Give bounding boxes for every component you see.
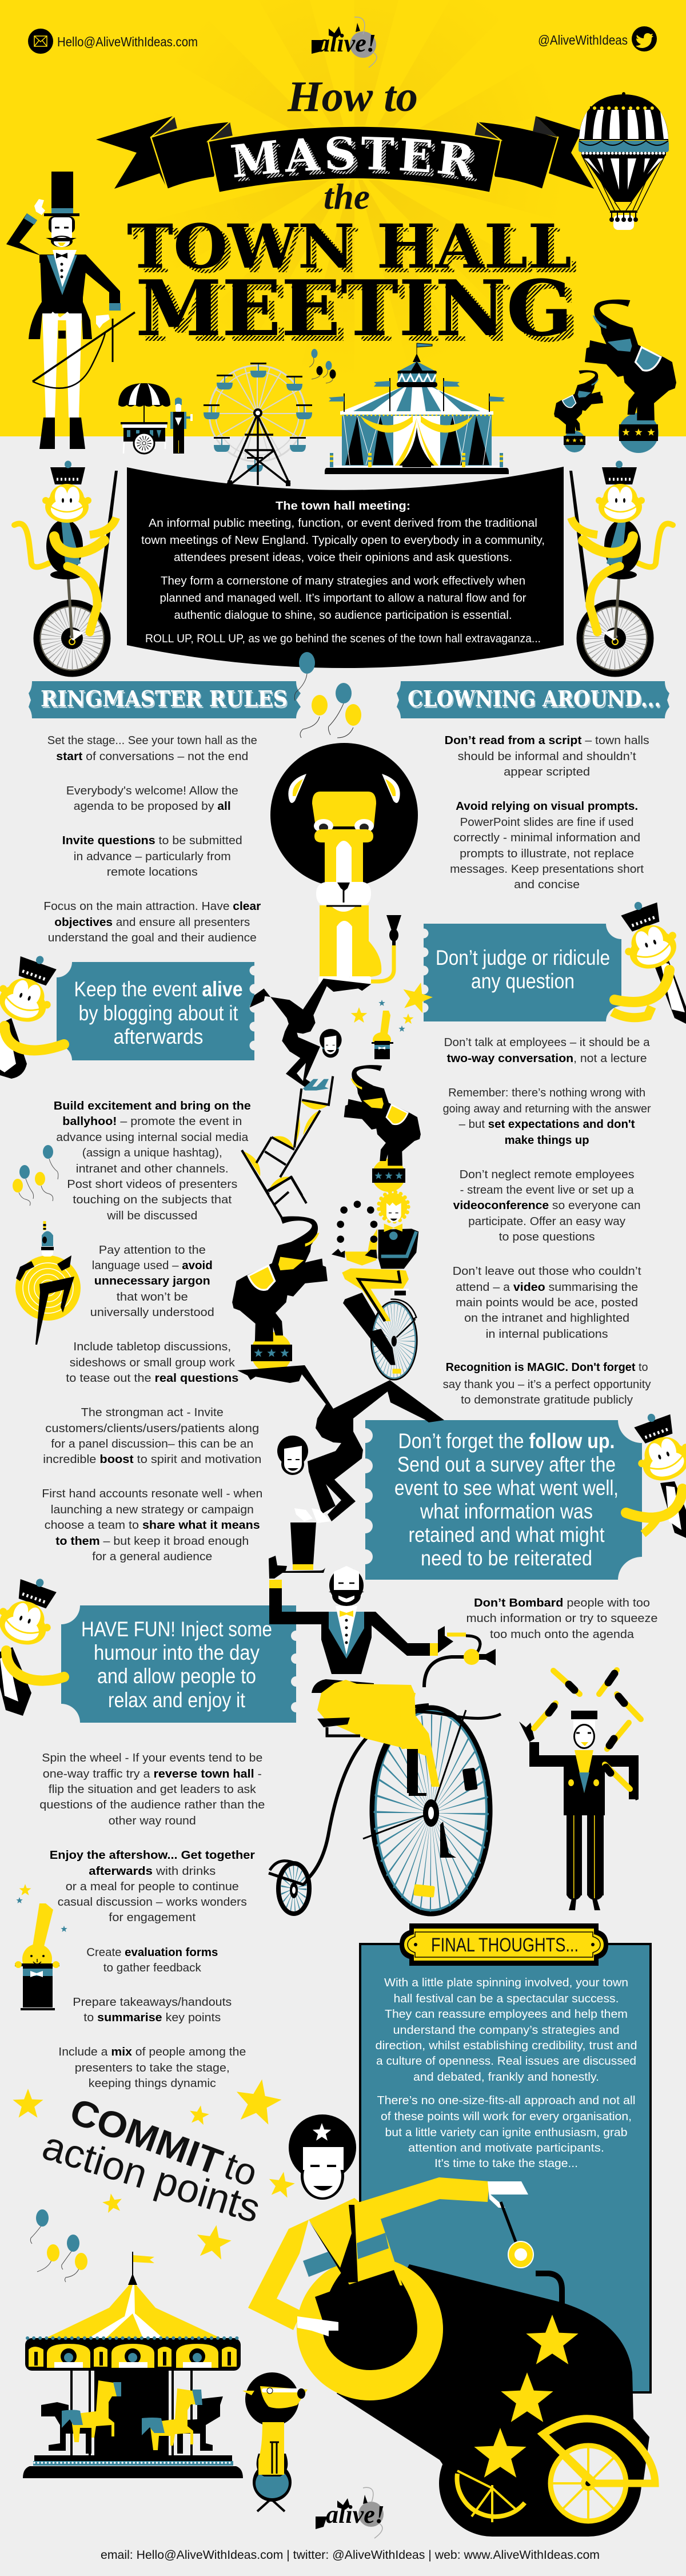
text column: ringmaster rules part 3: casual discussion – works wonders (58, 1896, 247, 1909)
ticket callout: keep the event alive: afterwards (113, 1025, 204, 1048)
text column: clowning around part 2: to demonstrate gratitude publicly (461, 1394, 633, 1406)
final thoughts text: of these points will work for every organisation, (381, 2110, 632, 2123)
text column: clowning around part 2: in internal publications (486, 1328, 608, 1341)
text column: ringmaster rules part 1: understand the goal and their audience (48, 932, 257, 944)
text column: clowning around part 2: participate. Offer an easy way (468, 1215, 625, 1228)
footer contact line: email: Hello@AliveWithIdeas.com | twitter: @AliveWithIdeas | web: www.AliveWithIdeas.com (101, 2548, 600, 2562)
final thoughts text (375, 1976, 637, 2170)
illustration: lion (270, 743, 418, 984)
illustration: rabbit in hat left (15, 1903, 59, 2009)
final thoughts text: a culture of openness. Real issues are discussed (376, 2054, 636, 2068)
ticket callout: keep the event alive: Keep the event alive (74, 977, 242, 1001)
title: Meeting: MEETING (135, 263, 573, 353)
ticket callout: don't forget the follow up: event to see what went well, (394, 1476, 619, 1500)
text column: ringmaster rules part 3 (39, 1752, 265, 2090)
illustration: stars around left rabbit (16, 1884, 67, 1932)
ticket callout: keep the event alive: by blogging about it (79, 1001, 238, 1025)
text column: ringmaster rules part 3: for engagement (109, 1911, 196, 1924)
title: Town Hall: TOWN HALL (127, 210, 572, 282)
stacked chairs (242, 1076, 333, 1195)
text column: clowning around part 1: appear scripted (504, 766, 590, 778)
title ribbon (96, 116, 594, 193)
final thoughts banner: FINAL THOUGHTS... (431, 1934, 579, 1956)
text column: clowning around part 2: Don’t neglect remote employees (460, 1168, 635, 1181)
intro paragraphs: planned and managed well. It’s important to allow a natural flow and for (160, 591, 527, 605)
text column: clowning around part 2: Remember: there’s nothing wrong with (448, 1087, 645, 1099)
intro paragraphs (141, 516, 545, 645)
ticket callout: have fun (61, 1605, 301, 1723)
text column: ringmaster rules part 2: to tease out the real questions (66, 1372, 238, 1385)
illustration: header balloons (309, 349, 336, 383)
illustration: elephant with rabbit on trunk (344, 1065, 421, 1192)
illustration: strongman acrobat (237, 1365, 444, 1523)
text column: ringmaster rules part 2: sideshows or small group work (70, 1357, 236, 1369)
text block: Don't Bombard: much information or try to squeeze (466, 1612, 657, 1625)
illustration: rabbit in hat small (372, 1011, 393, 1059)
ribbon: Clowning Around: CLOWNING AROUND... (409, 687, 662, 713)
ticket callout: have fun: humour into the day (94, 1641, 260, 1664)
title: Meeting: MEETING (142, 269, 580, 359)
text column: clowning around part 2: to pose questions (499, 1231, 595, 1243)
ticket callout: don't forget the follow up: what information was (420, 1500, 593, 1523)
ribbon: Clowning Around (397, 681, 669, 718)
contact: twitter (538, 26, 657, 51)
title: Town Hall: TOWN HALL (133, 215, 577, 287)
text column: clowning around part 2: – but set expectations and don't (459, 1118, 635, 1131)
final thoughts text: It's time to take the stage... (434, 2157, 578, 2170)
text column: ringmaster rules part 2: will be discussed (106, 1210, 197, 1222)
text column: clowning around part 2: Don’t leave out those who couldn’t (453, 1265, 641, 1278)
yellow header background (0, 0, 686, 436)
text column: clowning around part 2 (443, 1036, 651, 1406)
illustration: peeking monkey left (0, 947, 65, 1079)
ticket callout: don't forget the follow up: retained and what might (408, 1523, 605, 1547)
illustration: cannon performer (248, 2114, 533, 2345)
final thoughts text: direction, whilst establishing credibility, trust and (375, 2039, 637, 2052)
ticket callout: don't forget the follow up: Send out a survey after the (397, 1453, 616, 1476)
text column: clowning around part 2: - stream the event live or set up a (460, 1184, 634, 1196)
text column: ringmaster rules part 1: Everybody's welcome! Allow the (66, 785, 238, 797)
text column: ringmaster rules part 2: incredible boost to spirit and motivation (43, 1453, 261, 1466)
text column: ringmaster rules part 2: The strongman act - Invite (81, 1406, 224, 1419)
illustration: balloons bottom (30, 2209, 87, 2282)
text column: clowning around part 1 (445, 734, 649, 891)
text column: clowning around part 1: PowerPoint slides are fine if used (460, 816, 634, 829)
text column: ringmaster rules part 2: Include tabletop discussions, (73, 1341, 231, 1353)
text column: ringmaster rules part 3: flip the situation and get leaders to ask (49, 1783, 257, 1796)
ticket callout: have fun: HAVE FUN! Inject some (81, 1617, 272, 1641)
text column: ringmaster rules part 3: Prepare takeaways/handouts (73, 1996, 232, 2009)
contact: twitter: @AliveWithIdeas (538, 33, 628, 47)
text column: ringmaster rules part 2: Build excitement and bring on the (54, 1100, 251, 1112)
illustration: peeking monkey follow up (624, 1405, 686, 1538)
illustration: hot air balloon (579, 92, 669, 230)
performer head (289, 2114, 356, 2200)
intro paragraphs: authentic dialogue to shine, so audience participation is essential. (174, 609, 512, 622)
text column: ringmaster rules part 2: to them – but keep it broad enough (55, 1535, 249, 1548)
illustration: stars around rabbit (351, 979, 436, 1032)
text column: ringmaster rules part 2: unnecessary jargon (94, 1275, 210, 1287)
text column: clowning around part 1: and concise (514, 878, 580, 891)
heading: commit to action points: to (219, 2144, 263, 2195)
text column: ringmaster rules part 3: Spin the wheel - If your events tend to be (42, 1752, 262, 1764)
ticket callout: don't forget the follow up: need to be reiterated (421, 1547, 592, 1570)
text column: ringmaster rules part 2: customers/clients/users/patients along (45, 1422, 259, 1435)
rider head (329, 1566, 364, 1606)
final thoughts text: hall festival can be a spectacular success. (393, 1992, 619, 2005)
text column: clowning around part 1: messages. Keep presentations short (450, 863, 644, 876)
illustration: ringmaster (6, 172, 135, 449)
illustration: acrobat with chairs (242, 979, 371, 1195)
text column: clowning around part 2: on the intranet and highlighted (464, 1312, 629, 1325)
illustration: juggling clown on unicycle (332, 1192, 418, 1380)
text column: clowning around part 1: should be informal and shouldn’t (458, 750, 636, 763)
ticket callout: keep the event alive (57, 962, 260, 1060)
text column: clowning around part 1: correctly - minimal information and (453, 832, 640, 844)
text column: ringmaster rules part 2: ballyhoo! – promote the event in (62, 1115, 242, 1128)
acrobat head (320, 1029, 342, 1058)
illustration: ferris wheel (204, 363, 312, 486)
panel: introduction (127, 467, 564, 668)
text column: ringmaster rules part 2: launching a new strategy or campaign (51, 1504, 254, 1516)
ribbon: Ringmaster Rules (29, 681, 301, 718)
ticket callout: don't judge: Don’t judge or ridicule (436, 946, 610, 969)
ticket callout: don't judge (418, 924, 621, 1021)
text column: ringmaster rules part 3: one-way traffic try a reverse town hall - (43, 1768, 262, 1780)
ribbon: Ringmaster Rules: RINGMASTER RULES (42, 687, 289, 713)
acrobat figure (250, 979, 371, 1087)
text column: ringmaster rules part 1: Invite questions to be submitted (62, 834, 242, 847)
illustration: yellow stars (13, 2076, 297, 2261)
intro paragraphs: They form a cornerstone of many strategies and work effectively when (161, 574, 525, 587)
logo: alive: alive! (317, 29, 376, 57)
text column: ringmaster rules part 1: in advance – particularly from (74, 850, 231, 863)
text column: ringmaster rules part 3: other way round (109, 1815, 196, 1827)
illustration: lower chair continuation (242, 1150, 306, 1219)
text column: ringmaster rules part 2: universally understood (90, 1306, 214, 1319)
text column: ringmaster rules part 3: to gather feedback (103, 1962, 202, 1974)
logo: alive (312, 17, 377, 67)
illustration: peeking monkey right (611, 893, 686, 1024)
text column: ringmaster rules part 2: Post short videos of presenters (67, 1178, 237, 1191)
contact: email (28, 29, 198, 54)
text column: clowning around part 2: say thank you – it’s a perfect opportunity (443, 1378, 651, 1391)
text column: ringmaster rules part 1: Focus on the main attraction. Have clear (43, 900, 261, 913)
text column: clowning around part 2: two-way conversation , not a lecture (447, 1052, 647, 1065)
text column: ringmaster rules part 3: Enjoy the aftershow... Get together (50, 1849, 255, 1862)
intro paragraphs: ROLL UP, ROLL UP, as we go behind the scenes of the town hall extravaganza... (145, 632, 541, 645)
strongman head (277, 1436, 308, 1475)
text column: ringmaster rules part 2: for a general audience (92, 1551, 212, 1563)
illustration: large elephant on ball (585, 300, 676, 453)
text column: clowning around part 1: Don’t read from a script – town halls (445, 734, 649, 747)
text block: Don't Bombard: too much onto the agenda (490, 1628, 635, 1641)
illustration: small elephant on ball (554, 370, 603, 452)
illustration: elephant on ball mirrored (232, 1217, 328, 1373)
illustration: performer on yellow ball (15, 1221, 81, 1345)
final thoughts banner (400, 1923, 608, 1966)
text column: ringmaster rules part 3: questions of the audience rather than the (39, 1799, 265, 1811)
text column: ringmaster rules part 2: advance using internal social media (56, 1131, 249, 1144)
illustration: lion on stool (242, 2372, 308, 2511)
final thoughts text: With a little plate spinning involved, your town (384, 1976, 628, 1989)
final thoughts text: There’s no one-size-fits-all approach and not all (377, 2094, 636, 2107)
intro paragraphs: An informal public meeting, function, or event derived from the traditional (149, 516, 537, 530)
text column: clowning around part 2: videoconference so everyone can (453, 1199, 641, 1212)
ribbon: Ringmaster Rules: RINGMASTER RULES (41, 686, 288, 711)
ribbon: Clowning Around: CLOWNING AROUND... (408, 686, 661, 711)
text column: ringmaster rules part 2: intranet and other channels. (76, 1163, 229, 1175)
text column: ringmaster rules part 3: presenters to take the stage, (75, 2062, 230, 2074)
rider hat (280, 1522, 325, 1573)
rider raised arm (269, 1556, 332, 1624)
ticket callout: have fun: and allow people to (97, 1664, 256, 1688)
illustration: unicycle monkey left (14, 461, 118, 674)
penny farthing frame and wheels (269, 1705, 501, 1914)
text column: clowning around part 2: attend – a video summarising the (456, 1281, 638, 1294)
text column: ringmaster rules part 2: touching on the subjects that (73, 1194, 232, 1206)
illustration: ice cream vendor (170, 397, 193, 454)
final thoughts text: They can reassure employees and help them (385, 2007, 628, 2021)
text column: ringmaster rules part 2: that won’t be (117, 1291, 188, 1303)
rider legs and body (317, 1680, 478, 1898)
text block: Don't Bombard: Don’t Bombard people with too (474, 1597, 650, 1609)
illustration: juggling clubs (534, 1670, 641, 1789)
text column: clowning around part 2: main points would be ace, posted (456, 1297, 638, 1309)
text column: ringmaster rules part 2: language used – avoid (92, 1259, 213, 1272)
title: How to: How to (287, 73, 418, 121)
text column: clowning around part 2: make things up (505, 1134, 589, 1147)
logo: alive footer (316, 2487, 385, 2538)
text column: ringmaster rules part 2: Pay attention to the (99, 1244, 206, 1257)
text column: ringmaster rules part 3: to summarise key points (83, 2011, 221, 2024)
final thoughts text: understand the company’s strategies and (393, 2024, 620, 2037)
text column: clowning around part 2: Recognition is MAGIC. Don't forget to (446, 1361, 648, 1374)
panel: final thoughts (360, 1923, 651, 2392)
illustration: penny farthing rider (269, 1522, 501, 1914)
illustration: balloons between ribbons (294, 652, 361, 738)
title: Master: MASTER (231, 136, 473, 177)
ticket callout: have fun: relax and enjoy it (108, 1688, 246, 1712)
text column: ringmaster rules part 1: remote locations (107, 866, 198, 878)
text column: ringmaster rules part 2 (42, 1100, 262, 1563)
logo: alive footer: alive! (326, 2501, 385, 2529)
text column: clowning around part 1: Avoid relying on visual prompts. (456, 800, 638, 813)
text column: ringmaster rules part 1: agenda to be proposed by all (74, 800, 231, 813)
illustration: unicycle monkey right (569, 461, 673, 674)
ticket callout: don't forget the follow up: Don’t forget the follow up. (398, 1429, 615, 1453)
text column: clowning around part 2: Don’t talk at employees – it should be a (444, 1036, 651, 1049)
illustration: big top tent (325, 343, 509, 474)
text column: clowning around part 2: going away and returning with the answer (443, 1103, 651, 1115)
text column: ringmaster rules part 2: choose a team to share what it means (45, 1519, 260, 1532)
final thoughts text: but a little variety can ignite enthusiasm, grab (385, 2126, 628, 2139)
title: Master: MASTER (234, 140, 477, 182)
contact: email: Hello@AliveWithIdeas.com (57, 34, 198, 49)
text column: ringmaster rules part 2: for a panel discussion– this can be an (51, 1438, 253, 1450)
text column: ringmaster rules part 1: Set the stage... See your town hall as the (47, 734, 257, 747)
heading: commit to action points: action points (38, 2123, 265, 2231)
final thoughts text: attention and motivate participants. (408, 2141, 604, 2154)
illustration: cannon with performer (297, 2257, 655, 2537)
final thoughts text: and debated, frankly and honestly. (413, 2070, 599, 2084)
text column: ringmaster rules part 3: keeping things dynamic (89, 2077, 216, 2090)
text column: ringmaster rules part 2: (assign a unique hashtag), (82, 1147, 222, 1159)
illustration: peeking monkey have fun (0, 1569, 65, 1716)
illustration: juggler (519, 1711, 639, 1910)
illustration: carousel (23, 2252, 243, 2478)
illustration: ice cream cart (118, 383, 170, 454)
intro heading: The town hall meeting: (276, 499, 410, 512)
text column: ringmaster rules part 3: Create evaluation forms (86, 1946, 218, 1959)
text column: ringmaster rules part 3: or a meal for people to continue (66, 1881, 239, 1893)
intro paragraphs: town meetings of New England. Typically open to everybody in a community, (141, 534, 545, 547)
text block: Don't Bombard (466, 1597, 657, 1641)
carousel horses (41, 2380, 223, 2454)
text column: ringmaster rules part 2: First hand accounts resonate well - when (42, 1488, 262, 1500)
title: the: the (324, 176, 370, 217)
heading: commit to action points: COMMIT (65, 2090, 228, 2183)
ticket callout: don't judge: any question (471, 969, 575, 993)
text column: ringmaster rules part 3: Include a mix of people among the (58, 2046, 246, 2058)
ticket callout: don't forget the follow up (358, 1420, 642, 1580)
text column: clowning around part 1: prompts to illustrate, not replace (460, 848, 634, 860)
intro paragraphs: attendees present ideas, voice their opinions and ask questions. (174, 551, 512, 564)
illustration: balloons left (13, 1145, 58, 1206)
text column: ringmaster rules part 1: objectives and ensure all presenters (54, 916, 250, 929)
text column: ringmaster rules part 3: afterwards with drinks (89, 1865, 216, 1878)
text column: ringmaster rules part 1: start of conversations – not the end (56, 750, 248, 763)
text column: ringmaster rules part 1 (43, 734, 261, 944)
